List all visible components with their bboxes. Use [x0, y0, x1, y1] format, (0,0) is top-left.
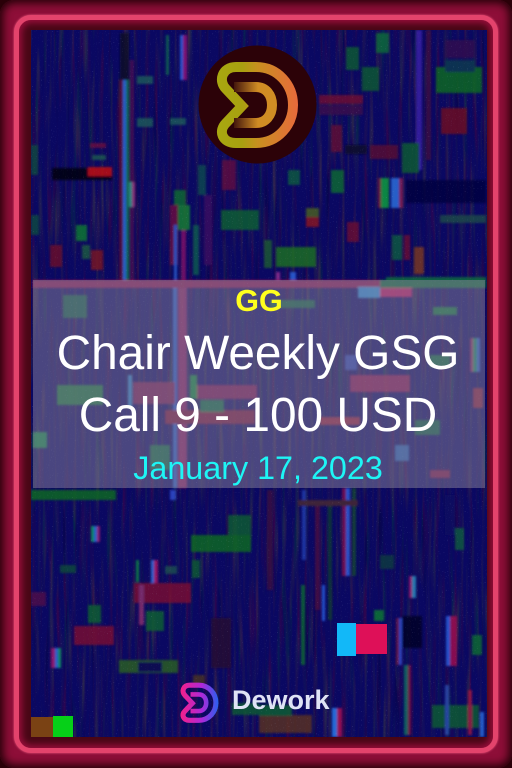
top left [31, 145, 38, 175]
bottom left [31, 490, 116, 500]
title line 2: Call 9 - 100 USD [79, 389, 437, 442]
title line 1: Chair Weekly GSG [57, 327, 459, 380]
panel: title band [33, 280, 485, 488]
date: January 17, 2023 [133, 450, 383, 486]
title band backdrop [33, 280, 380, 288]
heading: GG: GG [235, 284, 283, 318]
bottom right [342, 488, 346, 576]
Dework wordmark: Dework [232, 685, 330, 715]
top right [346, 47, 359, 70]
bright blocks [31, 623, 387, 737]
icon: top logo [198, 46, 316, 164]
icon: Dework logo [180, 682, 218, 723]
